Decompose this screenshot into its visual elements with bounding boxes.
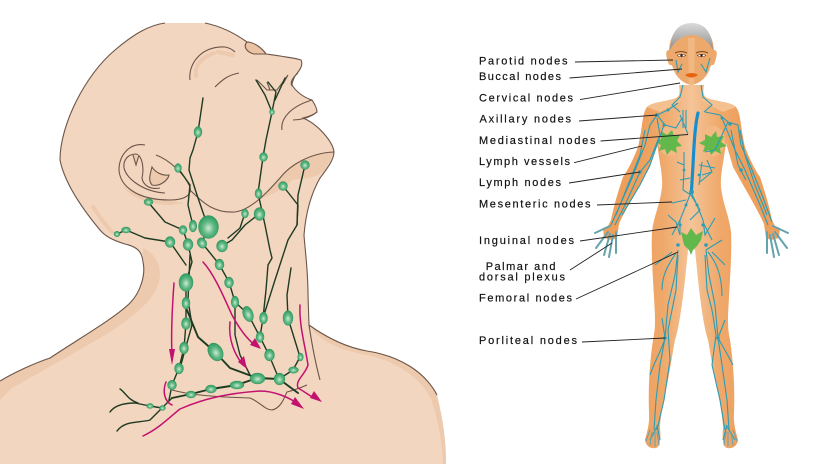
labels: Mediastinal nodes	[479, 135, 596, 147]
leader lines	[569, 60, 688, 342]
labels: Mesenteric nodes	[479, 198, 591, 210]
lymph vessels	[110, 78, 305, 431]
facial features	[119, 42, 334, 410]
magenta flow arrows	[143, 262, 316, 436]
labels: Buccal nodes	[479, 71, 562, 83]
labels: Lymph nodes	[479, 177, 562, 189]
lymph nodes	[114, 109, 310, 410]
labels: Femoral nodes	[479, 293, 572, 305]
head outline	[0, 23, 437, 395]
labels	[479, 56, 596, 347]
illustration: full body lymphatic system	[595, 23, 788, 448]
body silhouette	[603, 23, 780, 448]
body node dots	[638, 108, 743, 340]
labels: Porliteal nodes	[479, 335, 578, 347]
labels: Parotid nodes	[479, 56, 568, 68]
illustration: head and neck lymphatics	[0, 23, 446, 464]
mammary and groin nodes	[656, 130, 727, 255]
labels: Axillary nodes	[480, 114, 572, 126]
blue thoracic duct	[692, 113, 698, 190]
labels: Palmar and	[486, 261, 556, 273]
labels: Lymph vessels	[479, 156, 570, 168]
skin shading	[0, 152, 446, 464]
body lymph vessels	[611, 58, 772, 440]
head and shoulders silhouette	[0, 23, 446, 464]
labels: dorsal plexus	[479, 272, 566, 284]
hand and foot vessels	[595, 226, 788, 446]
labels: Inguinal nodes	[479, 235, 574, 247]
labels: Cervical nodes	[479, 93, 574, 105]
